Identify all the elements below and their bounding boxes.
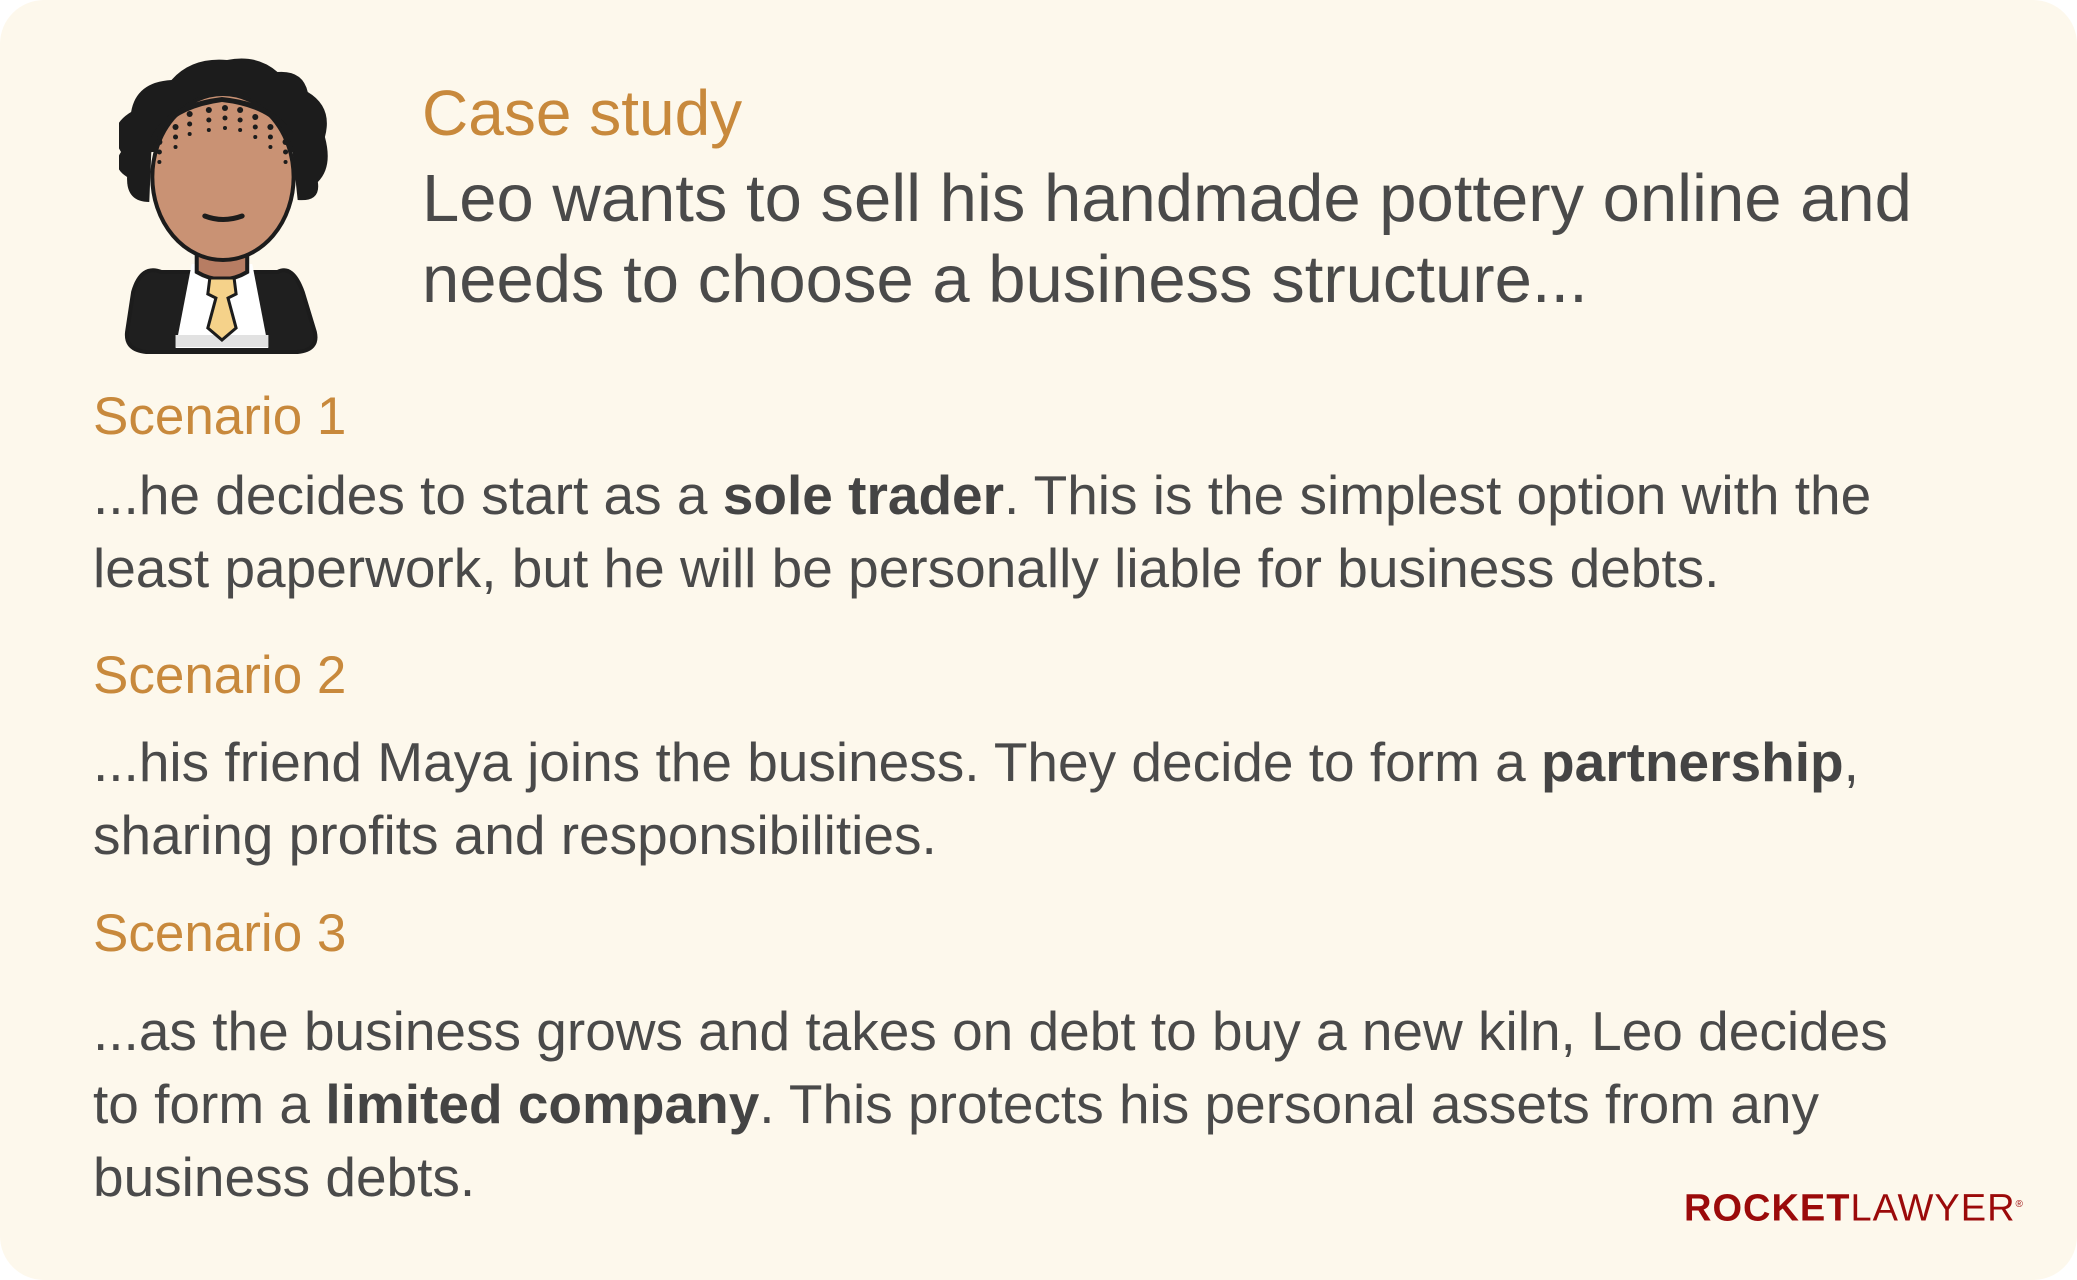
subtitle <box>422 161 1912 317</box>
text: scenario 2: ...his friend Maya joins the business. They decide to form a partnership, <box>93 731 1859 793</box>
text: scenario 2: sharing profits and responsibilities. <box>93 804 937 866</box>
heading: scenario 2: Scenario 2 <box>93 646 346 705</box>
text: scenario 3: business debts. <box>93 1146 475 1208</box>
subtitle: Leo wants to sell his handmade pottery online and <box>422 161 1912 236</box>
text: scenario 3: ...as the business grows and takes on debt to buy a new kiln, Leo decides <box>93 1000 1888 1062</box>
text: scenario 1: least paperwork, but he will be personally liable for business debts. <box>93 537 1719 599</box>
logo: rocket lawyer: ROCKETLAWYER® <box>1684 1188 2024 1230</box>
heading: scenario 3: Scenario 3 <box>93 904 346 963</box>
icon: avatar <box>119 58 328 354</box>
text: scenario 1 <box>93 464 1871 599</box>
heading: scenario 1: Scenario 1 <box>93 387 346 446</box>
text: scenario 1: ...he decides to start as a sole trader. This is the simplest option with the <box>93 464 1871 526</box>
subtitle: needs to choose a business structure... <box>422 242 1588 317</box>
text: scenario 3: to form a limited company. This protects his personal assets from any <box>93 1073 1819 1135</box>
text: scenario 3 <box>93 1000 1888 1208</box>
text: scenario 2 <box>93 731 1859 866</box>
heading: case study: Case study <box>422 77 742 149</box>
